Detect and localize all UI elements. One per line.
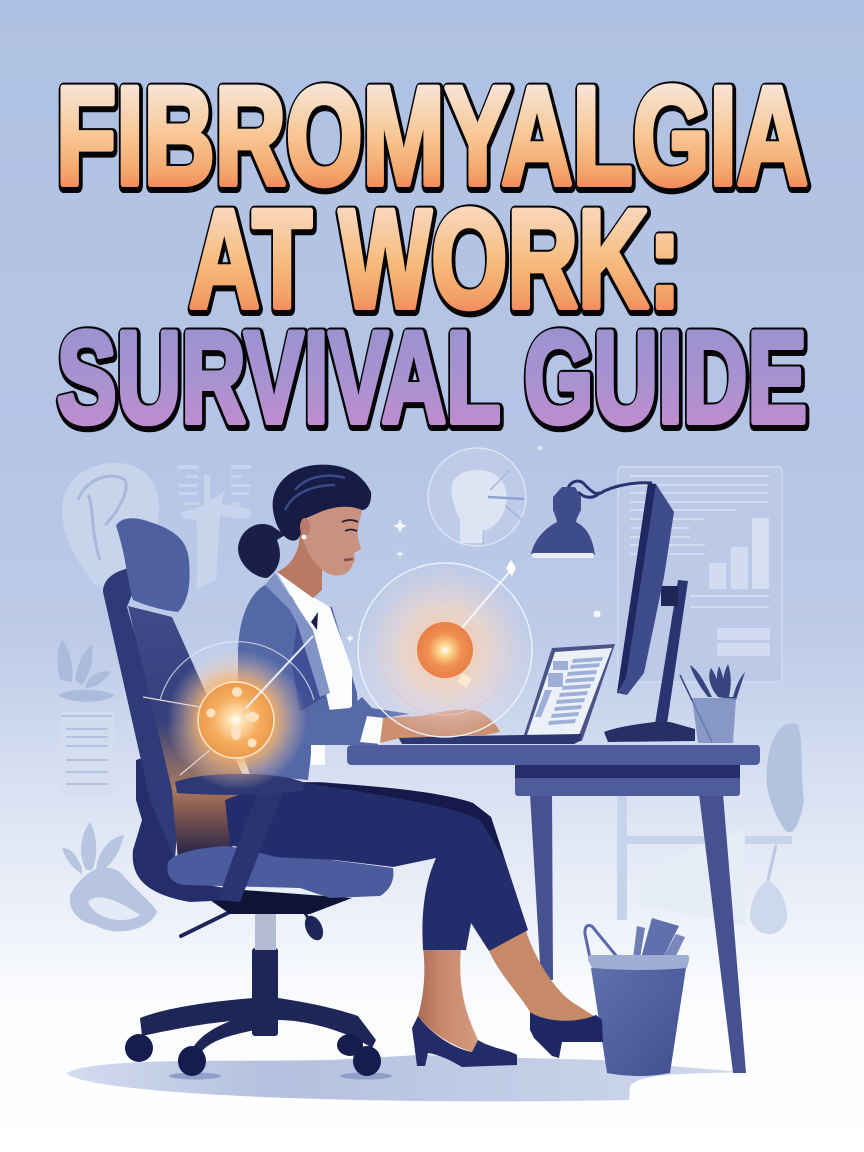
inner ring [380,585,510,715]
trousers [225,782,528,951]
stand connector [661,586,678,606]
blazer arm [250,640,410,745]
pain glow lower back [143,636,314,790]
title [56,57,809,452]
chair armrest [175,774,303,902]
ghost icon: checklist [61,712,114,797]
lamp light strip [532,553,594,558]
shirt cuff [360,716,384,744]
front shoe [412,1016,517,1067]
armrest post [218,792,283,902]
blazer inner panel [292,622,330,712]
bin rim [588,955,689,970]
shirt [277,572,352,712]
sparkles [346,444,600,643]
desk [347,745,760,1073]
desk top [347,745,760,765]
ear [300,518,310,536]
laptop screen [522,644,615,741]
nerve orb [198,682,274,758]
nerve rays to chair [143,697,210,775]
monitor back [617,483,674,695]
bin clip [585,925,618,958]
pencil [680,675,712,742]
ghost icon: potted plant upper left [57,640,115,702]
chair levers [181,905,327,943]
desk lamp and arm [531,481,652,558]
hair [273,465,371,541]
hair highlights [285,476,345,510]
trouser top shadow [300,782,505,860]
glow halo [167,650,307,790]
floor shadow [66,1055,742,1101]
chair silver column [255,914,276,950]
desk under panel [515,766,740,796]
front leg [418,948,478,1052]
laptop base [398,734,582,744]
blazer body [238,585,360,780]
blazer lapel [265,573,330,697]
bin body [591,968,686,1076]
ghost icon: head and neck profile [62,463,159,590]
ghost icon: head in circular diagram [428,448,526,546]
monitor stand [655,580,688,724]
ray to spark [462,570,511,628]
ghost icon: figure right edge [750,723,804,934]
chair base [140,948,376,1055]
laptop [398,644,615,744]
chair backrest frame [103,567,180,860]
desk far leg [530,794,553,980]
orb [417,622,473,678]
chair back support [133,755,232,902]
eye and brow [342,520,358,531]
earring [302,535,306,539]
bin contents [633,918,685,960]
leaves [690,664,745,700]
orb cap [457,673,472,687]
laptop content [535,657,603,725]
cup [692,698,736,743]
face [302,506,362,575]
pain glow centre [358,560,532,737]
woman at desk [225,465,603,1067]
back shoe [530,1012,603,1058]
hands [380,709,500,743]
chair seat [167,846,393,898]
monitor edge [617,483,656,693]
office chair [103,518,393,1076]
collar shadow [311,612,318,630]
lamp arm [567,481,652,497]
trash bin [585,918,689,1076]
chair headrest [116,518,190,612]
chair mesh [128,606,245,860]
ghost icons background [57,448,804,934]
lips [344,559,353,560]
chair seat underside [190,886,352,914]
shirt below arm [311,745,325,765]
armrest pad [175,774,303,795]
orb nodes [206,687,259,748]
rings [358,563,532,737]
ponytail [238,524,285,578]
pen cup with leaves [680,664,745,743]
spark [506,560,516,576]
lamp head [531,487,595,555]
desk near leg [699,794,746,1073]
ghost icon: dashboard with bar chart [618,467,782,682]
neck [277,530,322,598]
ghost icon: plant in bowl lower left [62,822,157,931]
laptop display [527,648,612,735]
pain ray [246,636,313,708]
desk under shadow [515,764,740,778]
ghost icon: spine diagram [178,465,251,590]
ghost icon: furniture frame [617,795,792,925]
monitor on stand [604,483,695,742]
chair caster wheels [125,1034,381,1076]
stand base [604,722,695,742]
back leg [489,928,594,1021]
halo ring [160,642,314,700]
